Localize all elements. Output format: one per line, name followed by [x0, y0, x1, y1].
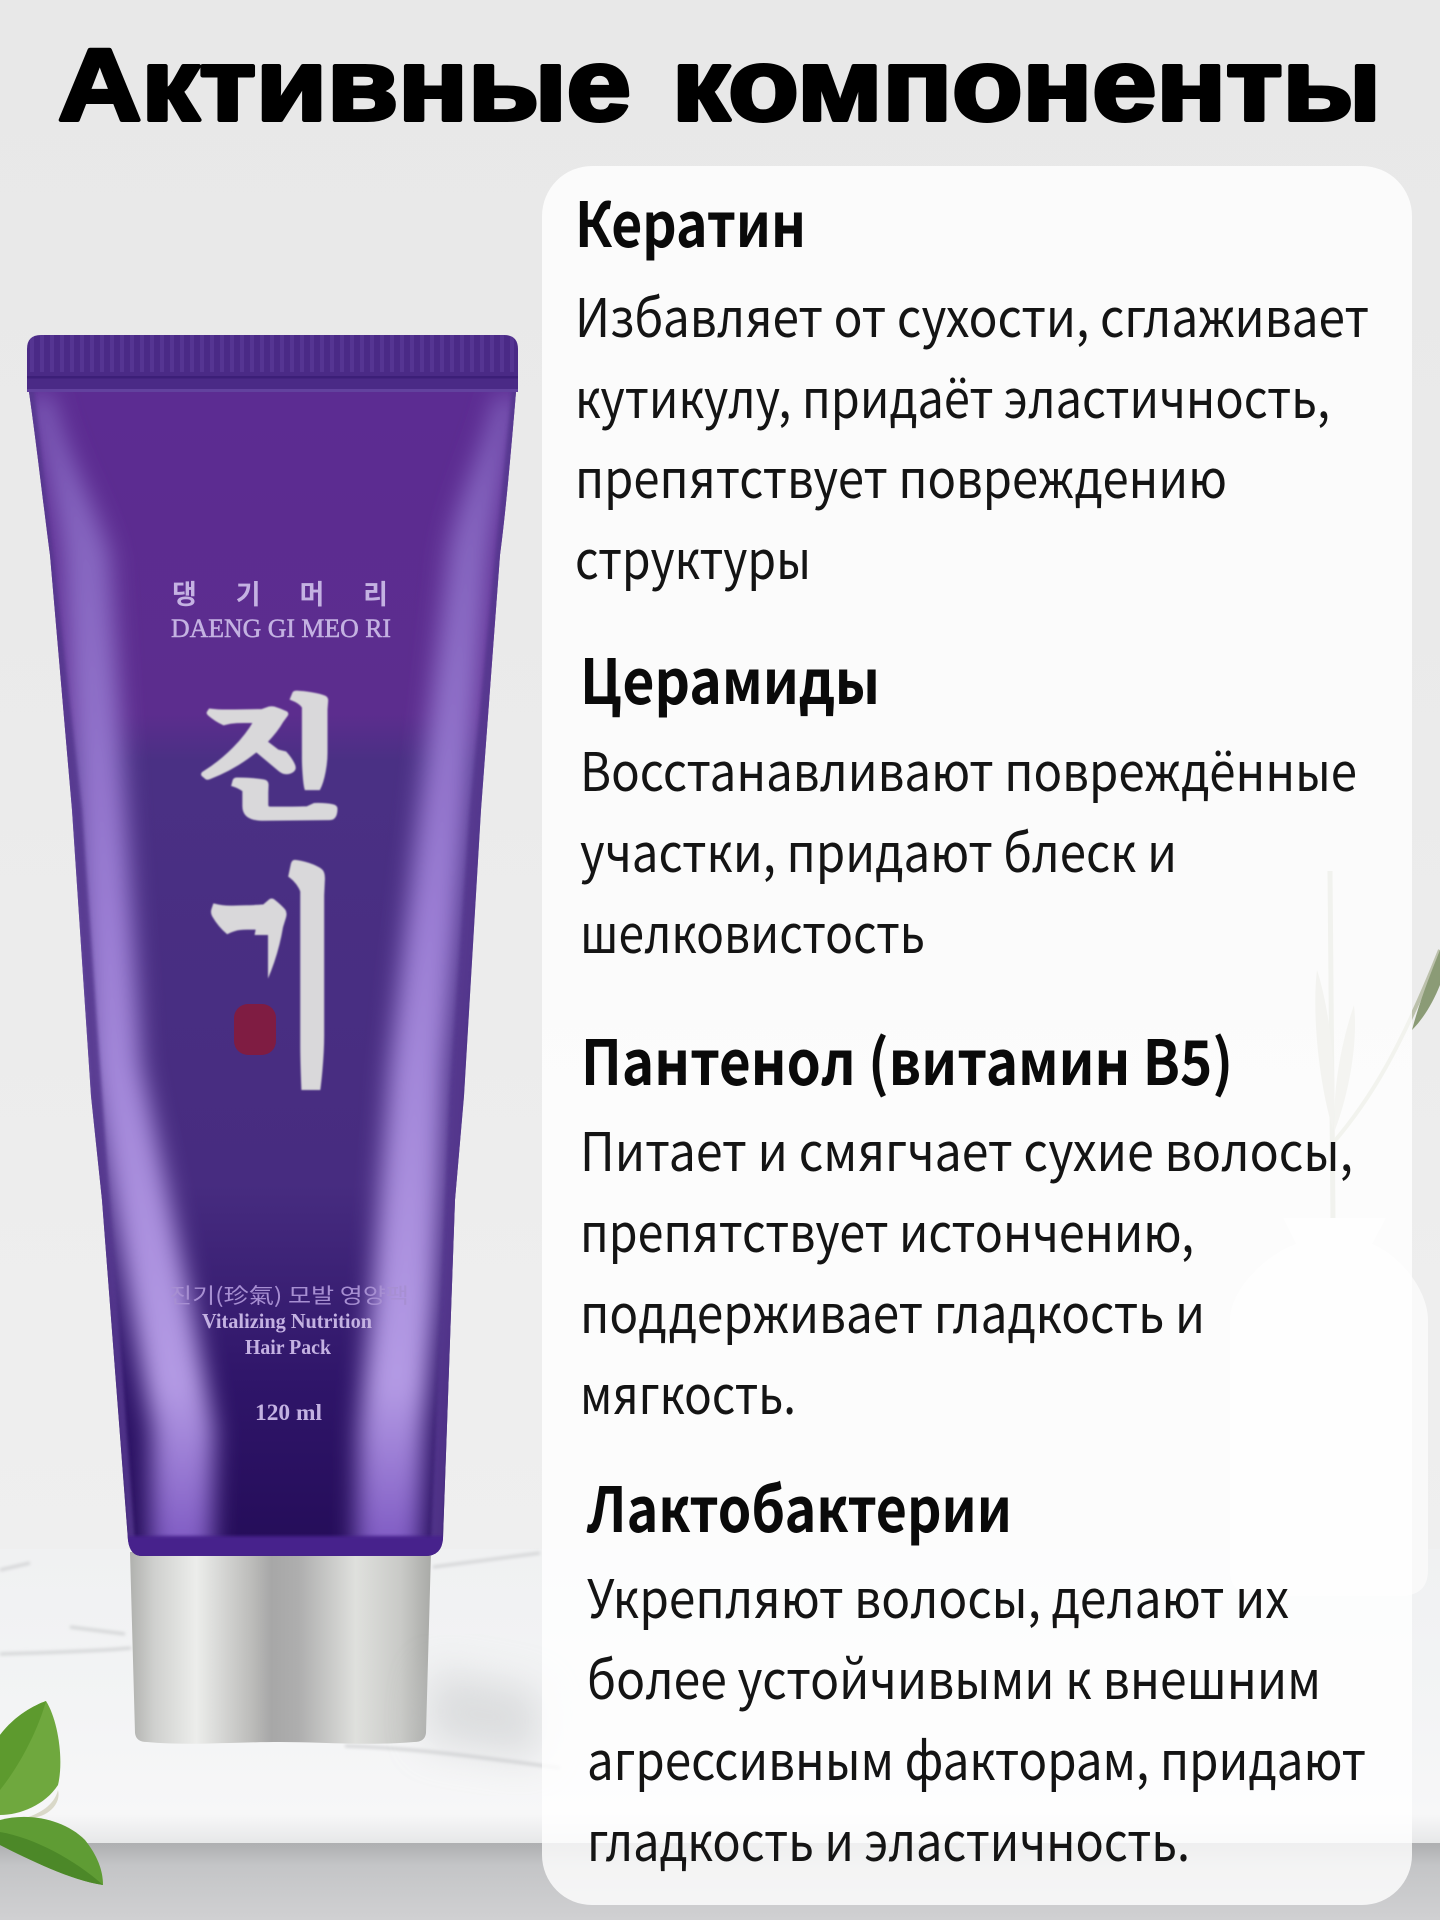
ingredient: panthenol: поддерживает гладкость и	[580, 1273, 1205, 1349]
tube: product name: Vitalizing Nutrition	[202, 1309, 372, 1333]
ingredient: panthenol: препятствует истончению,	[580, 1192, 1194, 1268]
ingredient: lactobacteria: гладкость и эластичность.	[587, 1801, 1190, 1877]
background: floor	[0, 1843, 1440, 1920]
tube: calligraphy logo	[200, 690, 338, 1091]
ingredient: ceramides: Церамиды	[580, 632, 880, 722]
ingredient: keratin	[575, 175, 1369, 595]
tube: metal cap	[130, 1552, 431, 1744]
background: marble table	[0, 1549, 1440, 1844]
ingredient: lactobacteria	[586, 1460, 1366, 1877]
ingredient: keratin: кутикулу, придаёт эластичность,	[575, 358, 1330, 434]
tube: red seal	[234, 1004, 276, 1055]
ingredient: lactobacteria: Укрепляют волосы, делают их	[587, 1558, 1289, 1634]
ingredient: ceramides: шелковистость	[580, 893, 925, 969]
ingredient: ceramides: участки, придают блеск и	[580, 812, 1177, 888]
ingredient: ceramides	[580, 632, 1357, 969]
ingredient: keratin: структуры	[575, 519, 811, 595]
ingredient: panthenol: Питает и смягчает сухие волосы,	[580, 1111, 1353, 1187]
ingredient: lactobacteria: Лактобактерии	[586, 1460, 1012, 1550]
panel background	[542, 166, 1412, 1905]
ingredient: panthenol: мягкость.	[580, 1354, 796, 1430]
ingredient: keratin: Кератин	[575, 175, 806, 265]
tube: calligraphy logo: 진	[193, 654, 346, 847]
cap shadow	[425, 1670, 540, 1760]
title: компоненты	[672, 28, 1381, 142]
title: Активные	[58, 28, 631, 142]
ingredient: ceramides: Восстанавливают повреждённые	[580, 731, 1357, 807]
tube: volume: 120 ml	[255, 1400, 322, 1425]
icon: green leaves	[0, 1701, 103, 1885]
tube: korean brand name: 댕 기 머 리	[172, 573, 388, 612]
tube: latin brand name: DAENG GI MEO RI	[171, 614, 391, 643]
ingredient: panthenol: Пантенол (витамин В5)	[581, 1013, 1233, 1103]
tube: body	[20, 385, 530, 1560]
product tube	[20, 335, 530, 1744]
tube: product type: Hair Pack	[245, 1335, 331, 1359]
panel: ingredients	[542, 166, 1412, 1905]
ingredient: lactobacteria: агрессивным факторам, придают	[587, 1720, 1366, 1796]
title	[58, 28, 1381, 142]
tube: calligraphy logo: 기	[200, 790, 341, 1150]
tube: korean product name: 진기(珍氣) 모발 영양팩	[169, 1280, 409, 1310]
ingredient: panthenol	[580, 1013, 1353, 1430]
ingredient: keratin: Избавляет от сухости, сглаживает	[575, 277, 1369, 353]
tube: crimped top	[27, 335, 518, 392]
ingredient: lactobacteria: более устойчивыми к внешним	[587, 1639, 1321, 1715]
ingredient: keratin: препятствует повреждению	[575, 438, 1227, 514]
background: vase and stems	[1230, 871, 1440, 1596]
